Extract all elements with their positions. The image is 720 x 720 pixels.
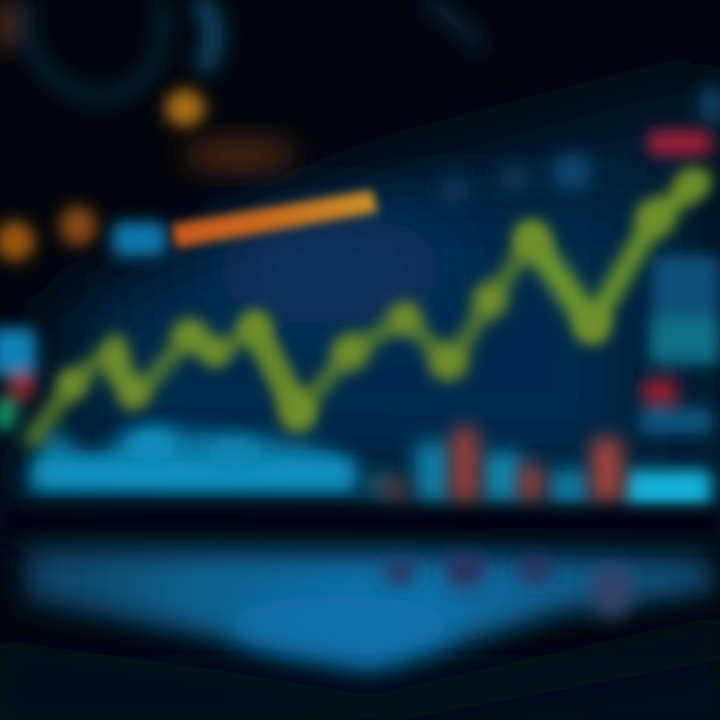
line chart: green zigzag (32, 180, 700, 440)
faint top-right data dots (439, 85, 720, 204)
dark horizon band (0, 510, 720, 534)
left edge markers (0, 328, 36, 431)
red volume bars (384, 428, 622, 503)
icon: circular gauge at top left (0, 0, 482, 97)
chart nodes (57, 170, 705, 432)
bottom shadow (0, 615, 720, 720)
area chart: cyan volume (28, 425, 711, 506)
reflection: chart mirrored on glossy surface (25, 548, 715, 672)
side panel top right: red and green markers (640, 130, 720, 434)
progress bar: cyan and orange (112, 190, 378, 256)
orange dots and streaks (0, 89, 298, 261)
